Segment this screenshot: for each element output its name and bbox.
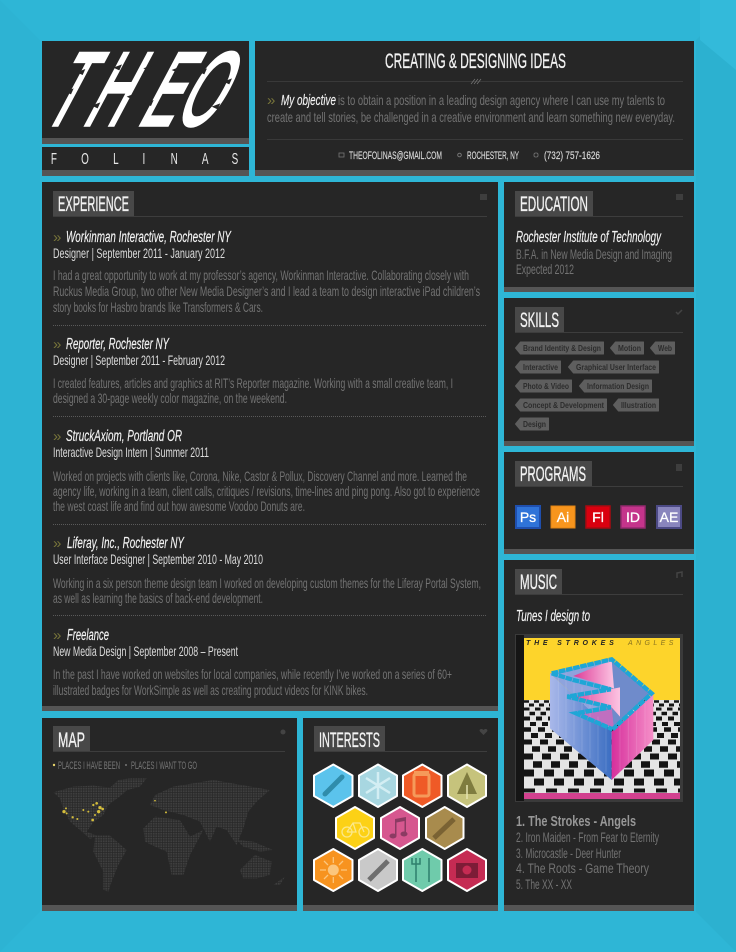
icon: cutlery hex (403, 849, 442, 891)
tracklist: 4. The Roots - Game Theory (516, 860, 649, 876)
job: Liferay: Working in a six person theme design team I worked on developing custom themes for the Liferay Portal System, (53, 575, 481, 591)
contact details: (732) 757-1626 (544, 150, 600, 162)
job: Liferay: User Interface Designer | September 2010 - May 2010 (53, 551, 263, 567)
contact details: THEOFOLINAS@GMAIL.COM (349, 150, 442, 162)
skill tags: Graphical User Interface (576, 363, 656, 372)
album cover (515, 634, 683, 802)
job: StruckAxiom: agency life, working in a team, client calls, critiques / revisions, time-lines and ping pong. Also got to experience (53, 483, 480, 499)
skill tags: Brand Identity & Design (523, 344, 601, 353)
job: Reporter: Reporter, Rochester NY (66, 336, 170, 353)
skill tags: Photo & Video (523, 382, 569, 391)
skill tags (516, 342, 674, 430)
logo name: THEO (28, 32, 262, 148)
job: Workinman: Workinman Interactive, Rochester NY (66, 229, 232, 246)
program icons: ID (626, 509, 640, 525)
education heading: EDUCATION (520, 193, 588, 216)
objective text (267, 92, 675, 125)
job: Reporter (53, 336, 453, 406)
icon: sun hex (314, 849, 352, 891)
contact details: ROCHESTER, NY (467, 150, 519, 162)
tracklist: 3. Microcastle - Deer Hunter (516, 845, 621, 861)
experience heading (53, 191, 487, 217)
panel: interests (303, 718, 498, 911)
programs heading: PROGRAMS (520, 463, 586, 486)
skill tags: Illustration (621, 401, 656, 410)
music heading: MUSIC (520, 571, 557, 594)
skill tags: Information Design (587, 382, 649, 391)
icon: snowboard hex (314, 764, 352, 807)
panel: experience (42, 182, 498, 711)
job: Reporter: Designer | September 2011 - February 2012 (53, 352, 225, 368)
job: Reporter: » (53, 336, 61, 353)
contact details (339, 150, 600, 162)
tracklist: 5. The XX - XX (516, 876, 572, 892)
experience heading: EXPERIENCE (58, 193, 129, 216)
tracklist: 1. The Strokes - Angels (516, 813, 636, 830)
panel: logo (28, 32, 262, 148)
skill tags: Concept & Development (523, 401, 604, 410)
skill tags: Motion (618, 344, 641, 353)
objective text: » (267, 92, 275, 109)
job: Liferay: » (53, 535, 61, 552)
icon: bicycle hex (336, 807, 374, 849)
job: StruckAxiom: Interactive Design Intern | Summer 2011 (53, 444, 209, 460)
objective text: My objective (281, 92, 336, 109)
job: Freelance: Freelance (67, 627, 109, 644)
album cover: THE STROKES (526, 640, 618, 647)
icon: flashlight hex (359, 849, 397, 891)
panel: skills (504, 298, 694, 446)
map heading: MAP (58, 729, 85, 752)
music heading (515, 569, 683, 595)
job: Freelance: illustrated badges for WorkSimple as well as creating product videos for KINK bikes. (53, 682, 368, 698)
icon: music notes hex (381, 807, 419, 849)
skills heading (515, 307, 683, 333)
skill tags: Web (658, 344, 672, 353)
map heading (53, 726, 286, 752)
job: Workinman: Designer | September 2011 - January 2012 (53, 245, 225, 261)
education heading (515, 191, 683, 217)
map legend: PLACES I WANT TO GO (131, 760, 197, 772)
map legend: PLACES I HAVE BEEN (58, 760, 120, 772)
education text: Expected 2012 (516, 261, 574, 277)
job: Workinman: » (53, 229, 61, 246)
job: Liferay: as well as learning the basics of back-end development. (53, 590, 263, 606)
panel: education (504, 182, 694, 292)
interests heading: INTERESTS (319, 729, 380, 752)
job: StruckAxiom: the west coast life and find out how awesome Voodoo Donuts are. (53, 498, 305, 514)
programs heading (515, 461, 683, 487)
job: Freelance: In the past I have worked on websites for local companies, while recently I’ve worked on a series of 60+ (53, 666, 452, 682)
job: StruckAxiom (53, 428, 480, 514)
job: StruckAxiom: Worked on projects with clients like, Corona, Nike, Castor & Pollux, Discovery Channel and more. Learned the (53, 468, 467, 484)
job: Liferay (53, 535, 481, 606)
panel: music (504, 560, 694, 911)
icon: pencil hex (426, 807, 464, 849)
job: Workinman (53, 229, 480, 315)
panel: map (42, 718, 297, 911)
job: Liferay: Liferay, Inc., Rochester NY (67, 535, 185, 552)
program icons: Ps (520, 509, 536, 525)
job: Workinman: Ruckus Media Group, two other New Media Designer’s and I lead a team to design interactive iPad children’s (53, 283, 480, 299)
job: StruckAxiom: StruckAxiom, Portland OR (66, 428, 182, 445)
album cover: ANGLES (627, 640, 677, 647)
panel: objective header (255, 41, 694, 176)
job: StruckAxiom: » (53, 428, 61, 445)
icon: beer mug hex (403, 764, 442, 807)
skills heading: SKILLS (520, 309, 559, 332)
world map (53, 778, 285, 892)
job: Freelance: » (53, 627, 61, 644)
icon: forest hex (448, 764, 486, 807)
education text (516, 229, 672, 277)
job: Reporter: I created features, articles and graphics at RIT’s Reporter magazine. Working with a small creative team, I (53, 375, 453, 391)
tracklist (516, 813, 659, 892)
skill tags: Interactive (523, 363, 558, 372)
program icons: Ai (557, 509, 569, 525)
job: Reporter: designed a 30-page weekly color magazine, on the weekend. (53, 390, 287, 406)
program icons: AE (660, 509, 678, 525)
panel: surname: FOLINAS (51, 150, 238, 168)
job: Freelance: New Media Design | September 2008 – Present (53, 643, 238, 659)
program icons (516, 506, 681, 528)
panel: surname (42, 147, 249, 176)
job: Workinman: story books for Hasbro brands like Transformers & Cars. (53, 299, 263, 315)
icon: snowflake hex (359, 764, 397, 807)
job: Workinman: I had a great opportunity to work at my professor’s agency, Workinman Interactive. Collaborating closely with (53, 267, 469, 283)
job: Freelance (53, 627, 452, 698)
music subheading: Tunes I design to (516, 608, 590, 625)
icon: camera hex (448, 849, 486, 891)
program icons: Fl (592, 509, 604, 525)
skill tags: Design (523, 420, 546, 429)
header title: CREATING & DESIGNING IDEAS (385, 50, 566, 73)
interests heading (314, 726, 487, 752)
panel: programs (504, 452, 694, 554)
